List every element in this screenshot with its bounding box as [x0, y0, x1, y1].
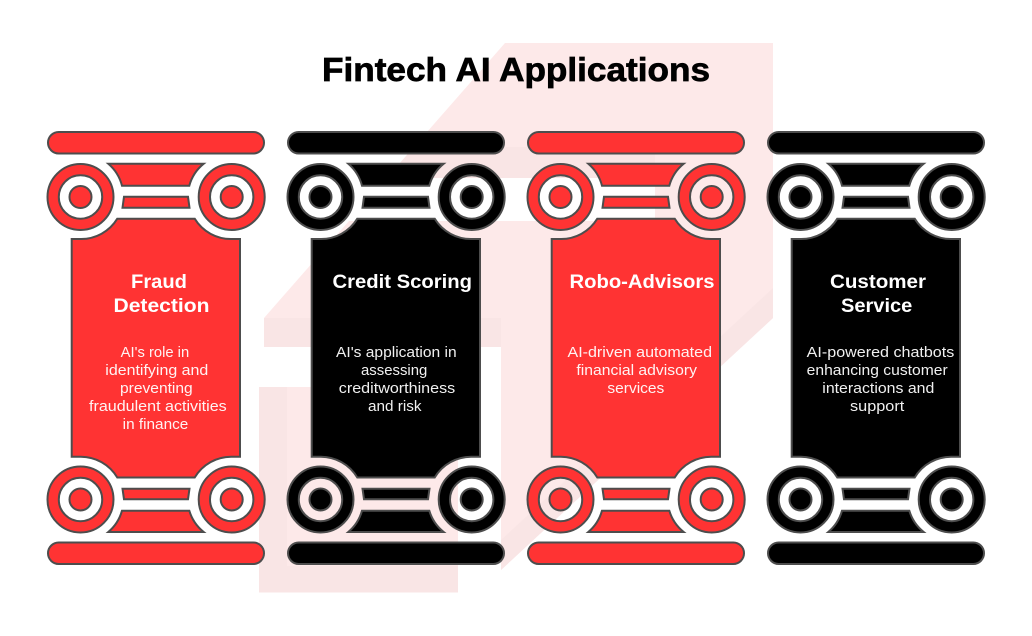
description: Customer Service [807, 345, 954, 415]
description: Robo-Advisors [568, 345, 712, 397]
description: Robo-Advisors: services [607, 381, 664, 397]
description: Credit Scoring: assessing [361, 363, 427, 379]
description: Fraud Detection: fraudulent activities [89, 399, 227, 415]
heading: Customer Service: Customer [830, 271, 926, 293]
title: Fintech AI Applications [322, 51, 710, 88]
description: Fraud Detection: in finance [123, 417, 188, 433]
column graphic: red [528, 132, 745, 564]
column graphic: black [288, 132, 505, 564]
description: Fraud Detection: preventing [120, 381, 193, 397]
description: Credit Scoring: creditworthiness [339, 381, 455, 397]
heading: Fraud Detection: Fraud [131, 271, 187, 293]
column graphic: red [48, 132, 265, 564]
panel: Customer Service column [768, 132, 985, 564]
heading: Fraud Detection [114, 271, 210, 317]
description: Customer Service: AI-powered chatbots [807, 345, 954, 361]
description: Credit Scoring: AI's application in [336, 345, 457, 361]
description: Fraud Detection [89, 345, 227, 433]
panel: Robo-Advisors column [528, 132, 745, 564]
background watermark logo [259, 43, 773, 592]
description: Customer Service: enhancing customer [807, 363, 948, 379]
heading: Credit Scoring: Credit Scoring [332, 271, 472, 293]
panel: Fraud Detection column [48, 132, 265, 564]
description: Credit Scoring: and risk [368, 399, 422, 415]
heading: Fraud Detection: Detection [114, 295, 210, 317]
description: Robo-Advisors: financial advisory [576, 363, 698, 379]
description: Robo-Advisors: AI-driven automated [568, 345, 712, 361]
heading: Customer Service: Service [841, 295, 912, 317]
column graphic: black [768, 132, 985, 564]
description: Fraud Detection: identifying and [105, 363, 208, 379]
heading: Customer Service [830, 271, 926, 317]
heading: Robo-Advisors: Robo-Advisors [570, 271, 715, 293]
panel: Credit Scoring column [288, 132, 505, 564]
description: Fraud Detection: AI's role in [121, 345, 189, 361]
description: Customer Service: interactions and [822, 381, 934, 397]
description: Credit Scoring [336, 345, 457, 415]
description: Customer Service: support [850, 399, 904, 415]
